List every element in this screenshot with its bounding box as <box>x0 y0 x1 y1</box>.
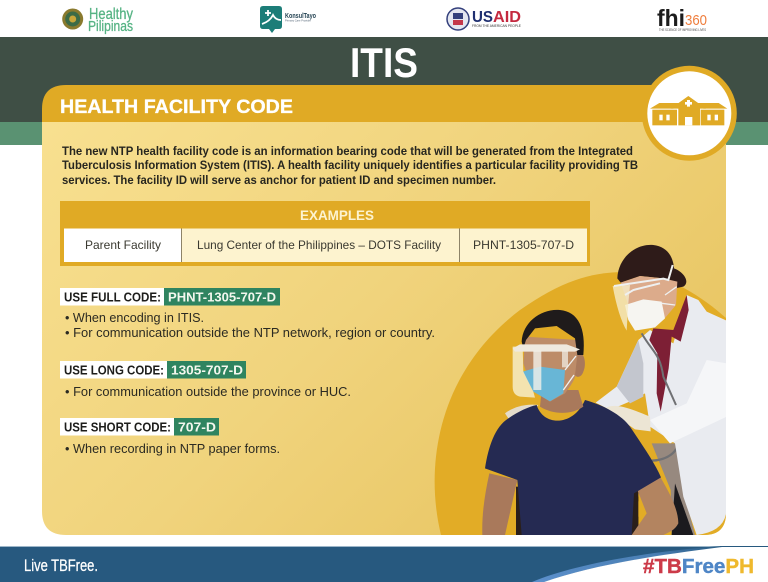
patient neck <box>540 390 583 413</box>
health worker body <box>596 295 727 535</box>
long code usage: 1305-707-D <box>171 364 243 378</box>
health worker head <box>613 245 686 331</box>
gold circle backdrop <box>435 272 726 535</box>
patient ear <box>575 353 585 377</box>
long code usage <box>60 361 351 399</box>
nurse bun and hair <box>617 245 686 288</box>
examples table <box>60 201 590 266</box>
patient arms <box>482 473 517 535</box>
logo: KonsulTayo: Primary Care Provider <box>285 20 311 22</box>
intro paragraph: The new NTP health facility code is an information bearing code that will be generated from the Integrated <box>62 144 633 158</box>
t-shirt <box>485 400 661 535</box>
maroon scrub <box>649 295 689 412</box>
short code usage: USE SHORT CODE: <box>64 420 171 434</box>
short code usage: • When recording in NTP paper forms. <box>65 441 280 456</box>
patient face shield <box>513 347 535 398</box>
logo: fhi 360: 360 <box>685 12 707 29</box>
stethoscope lower tube <box>652 448 676 462</box>
short code usage <box>60 418 280 456</box>
logo: fhi 360: THE SCIENCE OF IMPROVING LIVES <box>659 28 707 32</box>
coat <box>596 295 727 535</box>
hashtag: #TBFreePH <box>643 556 754 578</box>
title: ITIS <box>350 39 418 86</box>
logo: USAID: US <box>472 9 493 26</box>
header logo strip <box>0 0 768 37</box>
examples table: PHNT-1305-707-D <box>473 238 574 252</box>
full code usage: USE FULL CODE: <box>64 290 161 304</box>
logo: KonsulTayo <box>260 6 316 33</box>
logo: Healthy Pilipinas: Healthy <box>89 6 133 23</box>
panel: health facility code card <box>42 85 726 535</box>
footer band <box>0 546 768 582</box>
logo: USAID: AID <box>493 9 521 26</box>
logo: USAID <box>447 8 522 30</box>
dark green title band <box>0 37 768 122</box>
logo: Healthy Pilipinas <box>62 6 133 35</box>
intro paragraph <box>62 144 638 187</box>
logo: USAID: FROM THE AMERICAN PEOPLE <box>472 24 522 28</box>
patient head <box>513 310 585 413</box>
tagline: Live TBFree. <box>24 556 98 575</box>
icon: health facility building <box>642 66 737 161</box>
stethoscope upper tube <box>642 333 676 405</box>
full code usage: • When encoding in ITIS. <box>65 310 204 325</box>
logo: Healthy Pilipinas: Pilipinas <box>88 18 133 35</box>
footer curve <box>532 546 722 582</box>
photo: nurse examining patient <box>435 245 727 535</box>
chair <box>516 487 638 535</box>
examples table: EXAMPLES <box>300 207 374 223</box>
patient surgical mask <box>523 367 565 401</box>
full code usage: PHNT-1305-707-D <box>168 290 276 304</box>
nurse glasses and strap <box>614 265 673 295</box>
heading: HEALTH FACILITY CODE <box>60 96 293 118</box>
trousers <box>652 443 695 535</box>
patient face <box>523 337 579 402</box>
shoulder hand <box>505 405 538 420</box>
nurse mask <box>625 299 665 331</box>
intro paragraph: Tuberculosis Information System (ITIS). A health facility uniquely identifies a particular facility providing TB <box>62 158 638 172</box>
green stripe <box>0 122 768 145</box>
logo: fhi 360: fhi <box>657 5 685 31</box>
patient hair <box>522 310 584 355</box>
intro paragraph: services. The facility ID will serve as anchor for patient ID and specimen number. <box>62 173 496 187</box>
logo: fhi 360 <box>657 5 707 32</box>
full code usage <box>60 288 435 340</box>
long code usage: • For communication outside the province or HUC. <box>65 384 351 399</box>
long code usage: USE LONG CODE: <box>64 362 164 378</box>
patient body <box>482 400 678 535</box>
examples table: Parent Facility <box>85 238 161 252</box>
coat sleeve <box>650 360 727 443</box>
full code usage: • For communication outside the NTP network, region or country. <box>65 325 435 340</box>
glove <box>607 406 651 431</box>
nurse shield <box>613 285 630 331</box>
logo: KonsulTayo: KonsulTayo <box>285 11 316 20</box>
nurse face <box>621 276 677 320</box>
card body <box>42 122 726 535</box>
examples table: Lung Center of the Philippines – DOTS Facility <box>197 238 441 252</box>
card heading bar <box>42 85 680 122</box>
short code usage: 707-D <box>178 420 216 434</box>
